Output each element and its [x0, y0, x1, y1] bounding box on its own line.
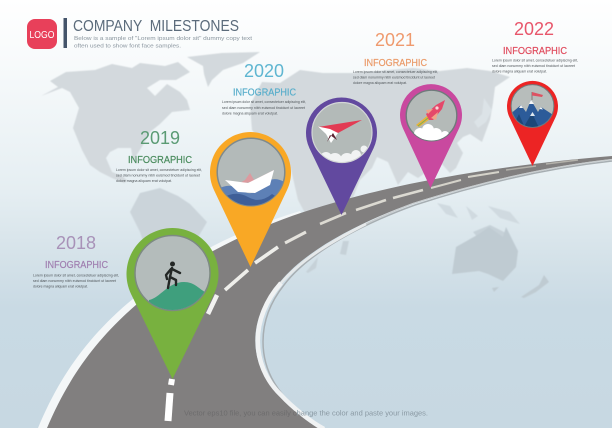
icon: mountains — [512, 100, 552, 127]
milestone text: 2022: INFOGRAPHIC — [503, 46, 567, 57]
map: greenland — [187, 52, 260, 87]
milestone text: 2022: 2022 — [514, 19, 554, 39]
footer caption: Vector eps10 file, you can easily c hange the color and paste your images. — [184, 408, 428, 418]
header — [27, 18, 253, 50]
icon: flag — [532, 92, 543, 100]
road: outer white edge — [38, 211, 302, 428]
milestone text: 2021: 2021 — [375, 30, 415, 50]
road — [38, 156, 612, 428]
milestone text: 2020: sed diam nonummy nibh euismod tincidunt ut laoreet — [222, 106, 305, 110]
icon: hiker — [166, 262, 180, 288]
map: indonesia — [437, 203, 520, 224]
icon: paper boat — [225, 170, 274, 193]
milestone text: 2021: INFOGRAPHIC — [364, 58, 427, 69]
milestone text: 2020: 2020 — [244, 61, 284, 81]
road: inner edge shadow — [263, 161, 612, 428]
milestone text: 2022 — [492, 19, 578, 74]
subtitle: Below is a sample of "Lorem ipsum dolor sit" dummy copy text — [74, 36, 253, 42]
map: new zealand — [521, 275, 549, 298]
milestone text: 2019: INFOGRAPHIC — [128, 155, 192, 166]
milestone text: 2021: sed diam nonummy nibh euismod tincidunt ut laoreet — [353, 76, 435, 80]
icon: paper plane — [318, 120, 362, 143]
logo badge: LOGO — [30, 30, 55, 41]
milestone text: 2018: Lorem ipsum dolor sit amet, consectetuer adipiscing elit, — [33, 274, 119, 278]
milestone text: 2019: 2019 — [140, 128, 180, 148]
icon: waves — [222, 179, 283, 206]
map: north america — [41, 62, 190, 183]
icon: cloud — [414, 124, 449, 140]
map: eurasia and africa — [250, 68, 510, 226]
milestone text: 2021: dolore magna aliquam erat volutpat. — [353, 81, 407, 85]
pin: 2020 purple, paper plane — [306, 98, 377, 215]
title: COMPANY MILESTONES — [73, 18, 239, 35]
milestone text: 2019: Lorem ipsum dolor sit amet, consectetuer adipiscing elit, — [116, 168, 202, 172]
milestone text: 2022: dolore magna aliquam erat volutpat. — [492, 70, 547, 74]
road: inner edge line — [258, 160, 612, 428]
world map — [41, 52, 549, 298]
milestone text: 2018 — [33, 233, 119, 288]
map: australia — [452, 227, 518, 281]
logo badge — [27, 19, 57, 49]
map: tasmania — [492, 287, 499, 292]
milestone text: 2020: Lorem ipsum dolor sit amet, consectetuer adipiscing elit, — [222, 100, 306, 104]
map: lower islands — [306, 225, 510, 273]
map: south america — [130, 188, 207, 262]
milestone text: 2018: INFOGRAPHIC — [45, 260, 108, 271]
milestone text: 2018: dolore magna aliquam erat volutpat. — [33, 284, 88, 288]
road: surface — [47, 156, 612, 428]
milestone text: 2018: 2018 — [56, 233, 96, 253]
milestone text: 2022: Lorem ipsum dolor sit amet, consectetuer adipiscing elit, — [492, 58, 578, 62]
pin: 2022 red, mountains and flag — [507, 81, 558, 166]
pin: 2021 pink, rocket — [400, 84, 462, 188]
subtitle: often used to show font face samples. — [74, 44, 182, 50]
header divider bar — [64, 18, 67, 48]
subtitle — [74, 36, 253, 50]
icon: clouds — [322, 146, 367, 162]
icon: rocket — [416, 100, 445, 127]
milestone text: 2021 — [353, 30, 438, 85]
milestone text: 2020 — [222, 61, 306, 116]
milestone text: 2019: dolore magna aliquam erat volutpat. — [116, 179, 172, 183]
milestone text: 2021: Lorem ipsum dolor sit amet, consectetuer adipiscing elit, — [353, 70, 438, 74]
pin: 2018 green, hiker on hill — [126, 228, 218, 379]
milestone text: 2020: dolore magna aliquam erat volutpat. — [222, 112, 278, 116]
milestone text: 2020: INFOGRAPHIC — [233, 88, 296, 98]
milestone text: 2022: sed diam nonummy nibh euismod tincidunt ut laoreet — [492, 64, 575, 68]
milestone text: 2019 — [116, 128, 202, 183]
pin: 2019 orange, paper boat — [210, 132, 291, 267]
map: japan — [474, 98, 492, 128]
milestone text: 2019: sed diam nonummy nibh euismod tincidunt ut laoreet — [116, 174, 200, 178]
icon: hill — [149, 282, 204, 310]
road: center dashes — [168, 160, 578, 421]
milestone text: 2018: sed diam nonummy nibh euismod tincidunt ut laoreet — [33, 279, 116, 283]
